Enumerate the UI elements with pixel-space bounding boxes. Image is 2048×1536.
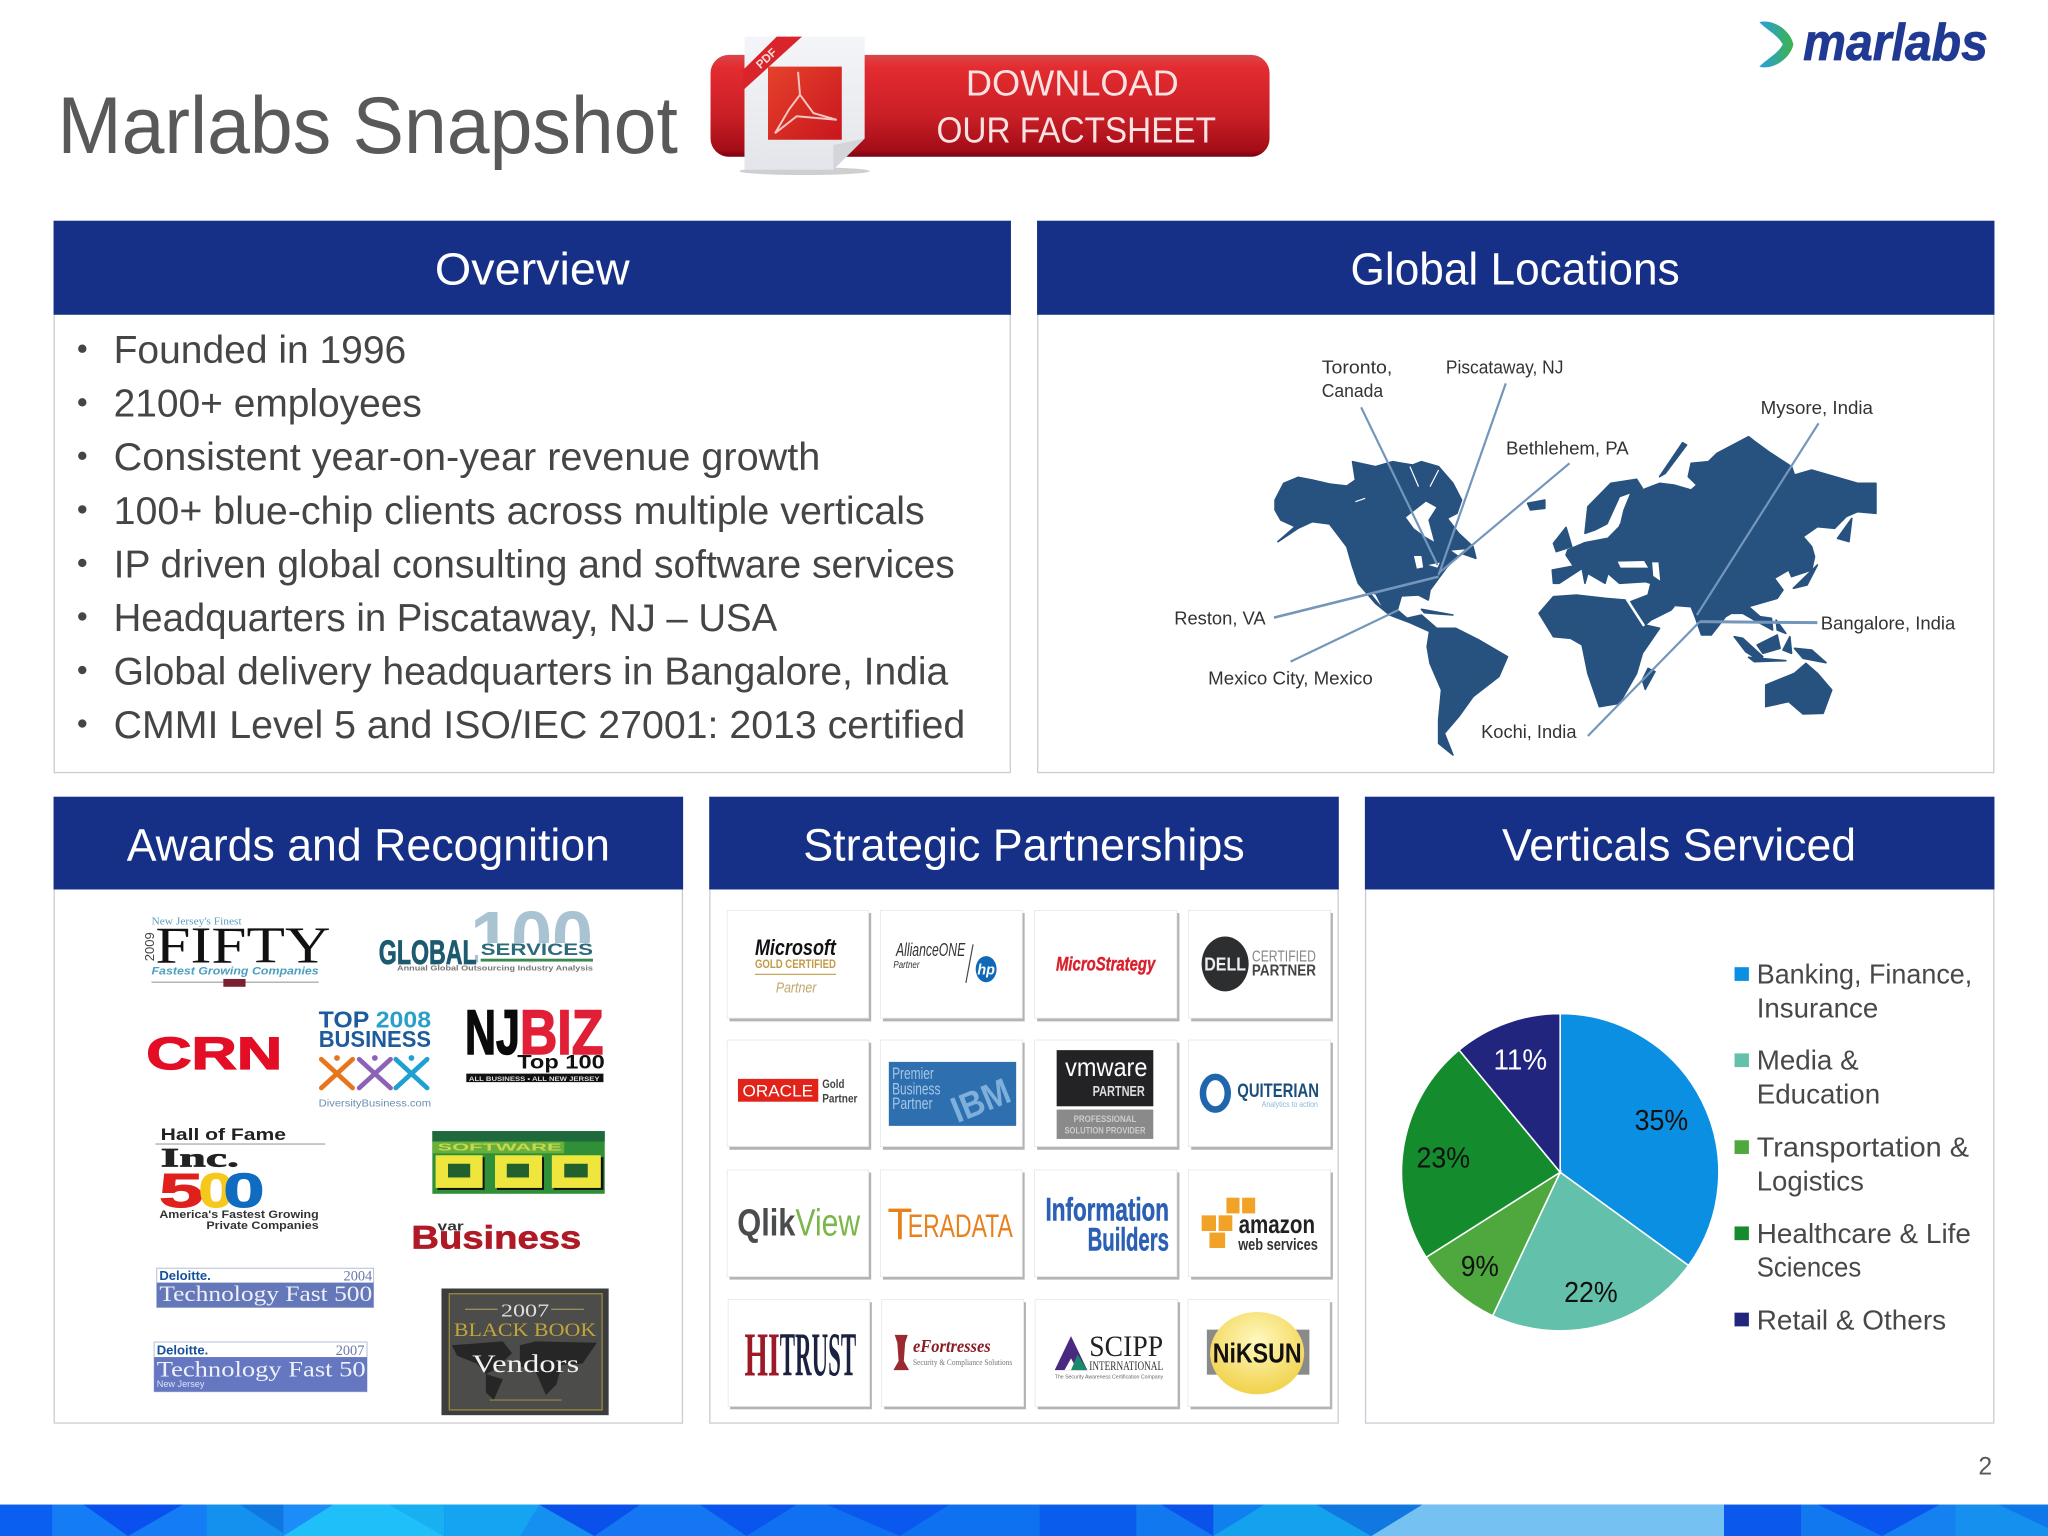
bullet list: Founded in 1996 [114,329,406,372]
award: var business: Business [411,1219,581,1256]
award: software 500 [432,1131,605,1194]
footer band [0,1505,2048,1536]
legend: Transportation & [1757,1132,1969,1163]
partner: scipp [1055,1330,1163,1381]
legend: Logistics [1757,1166,1864,1197]
partner: microsoft: GOLD CERTIFIED [755,958,836,971]
bullet list: Consistent year-on-year revenue growth [114,436,820,479]
partner: scipp: INTERNATIONAL [1089,1358,1163,1373]
partner: oracle: Partner [822,1092,858,1105]
partner: scipp: The Security Awareness Certification Company [1055,1375,1163,1381]
partner: teradata: ERADATA [908,1207,1013,1244]
heading: awards: Awards and Recognition [127,820,610,871]
partner: qlikview: View [795,1203,861,1245]
partner: dell [1202,936,1316,991]
pie data labels [1416,1045,1688,1309]
award: crn: CRN [146,1028,282,1079]
award: global services 100 [379,898,596,979]
partner: dell: PARTNER [1252,963,1316,980]
award: njbiz top 100: BIZ [520,998,603,1068]
partner: qlikview: Qlik [737,1203,796,1245]
partner: niksun [1207,1312,1309,1394]
partner: hp allianceone: Partner [893,960,920,971]
pie data labels: 35% [1635,1105,1688,1137]
partner: hp allianceone: AllianceONE [895,939,966,960]
bullet list: IP driven global consulting and software services [114,543,955,586]
award: black book vendors: Vendors [472,1351,579,1378]
partner: efortresses: eFortresses [913,1336,991,1356]
partner: oracle: Gold [822,1078,844,1091]
partner: microsoft: Partner [776,981,817,997]
location labels [1174,357,1956,742]
award: fifty: FIFTY [155,917,330,975]
bullet list [78,329,965,747]
partner: teradata: T [888,1201,912,1250]
partner: ibm: IBM [945,1070,1016,1131]
heading: verticals serviced: Verticals Serviced [1502,820,1856,871]
partner: ibm: Premier [892,1064,934,1083]
page number: 2 [1978,1454,1992,1481]
partner: vmware: SOLUTION PROVIDER [1064,1126,1146,1136]
award: global services 100: 100 [470,898,593,979]
legend [1735,959,1972,1336]
partner: amazon web services: amazon [1239,1209,1315,1239]
award: top 2008 business [319,1006,431,1109]
location labels: Mexico City, Mexico [1208,667,1373,688]
award: top 2008 business: TOP 2008 [319,1006,431,1032]
pie chart [1401,1014,1719,1331]
award: fifty [142,917,330,987]
partner: information builders: Builders [1088,1221,1169,1258]
partner: ibm: Partner [892,1094,933,1113]
award: njbiz top 100: ALL BUSINESS • ALL NEW JERSEY [469,1076,600,1083]
award: global services 100: SERVICES [481,941,593,959]
award: inc 500 hall of fame: 0 [223,1164,264,1218]
location labels: Mysore, India [1761,397,1874,418]
award: black book vendors: BLACK BOOK [454,1320,597,1341]
download factsheet button [711,37,1270,175]
partner: oracle: ORACLE [743,1081,813,1100]
partner: vmware: PROFESSIONAL [1074,1114,1137,1124]
award: fifty: Fastest Growing Companies [152,965,319,977]
award: deloitte technology fast 500: Deloitte. [159,1268,211,1283]
award: njbiz top 100: Top 100 [517,1052,605,1073]
location labels: Kochi, India [1481,721,1577,742]
partner cards backgrounds [727,910,1333,1409]
award: black book vendors: 2007 [501,1301,549,1321]
heading: strategic partnerships: Strategic Partnerships [803,820,1245,871]
award: fifty: New Jersey's Finest [152,917,242,928]
partner: hp allianceone [893,939,997,983]
award: inc 500 hall of fame: Hall of Fame [161,1125,286,1144]
award: deloitte technology fast 50 [154,1342,367,1392]
partner: amazon web services: web services [1237,1235,1318,1254]
bullet list: Headquarters in Piscataway, NJ – USA [114,597,778,640]
partner: efortresses: Security & Compliance Solutions [913,1358,1012,1367]
award: njbiz top 100 [465,998,606,1083]
panel: global locations [1037,221,1994,773]
legend: Sciences [1757,1252,1861,1283]
partner: hitrust [744,1319,856,1389]
panel: strategic partnerships: TRUST [780,1319,856,1389]
panel: overview [54,221,1011,773]
award: top 2008 business: DiversityBusiness.com [319,1098,431,1109]
award: global services 100: Annual Global Outsourcing Industry Analysis [397,964,593,972]
award: deloitte technology fast 500: Technology Fast 500 [159,1281,372,1306]
panel: awards and recognition [54,797,683,1423]
award: var business: var [438,1218,464,1233]
logo: marlabs: marlabs [1803,14,1988,72]
partner: quiterian: Analytics to action [1262,1100,1318,1109]
partner: hp allianceone: hp [977,962,995,978]
heading: global locations: Global Locations [1351,244,1680,295]
legend: Retail & Others [1757,1305,1946,1336]
download factsheet button: PDF [754,46,780,71]
partner: qlikview [737,1203,861,1245]
legend: Insurance [1757,992,1878,1023]
award: deloitte technology fast 50: Deloitte. [157,1342,208,1357]
partner: dell: DELL [1204,953,1246,974]
world map [1275,437,1876,755]
location labels: Piscataway, NJ [1446,357,1563,378]
partner: ibm: Business [892,1080,940,1099]
award: global services 100: GLOBAL [379,934,477,972]
legend: Education [1757,1079,1880,1110]
pie data labels: 22% [1564,1277,1618,1309]
pie data labels: 11% [1494,1045,1547,1077]
pie data labels: 9% [1461,1251,1499,1283]
partner: amazon web services [1202,1198,1318,1254]
award: inc 500 hall of fame: Inc. [161,1143,239,1172]
award: software 500: SOFTWARE [438,1143,563,1154]
award: inc 500 hall of fame: 0 [199,1164,234,1218]
location labels: Bangalore, India [1821,613,1956,634]
location connector lines [1274,383,1819,736]
partner: vmware: vmware [1065,1052,1147,1082]
award: njbiz top 100: NJ [465,998,520,1068]
award: deloitte technology fast 500 [157,1268,374,1307]
panel: strategic partnerships [709,797,1339,1423]
partner: microstrategy: MicroStrategy [1056,953,1156,975]
panel: verticals serviced [1365,797,1994,1423]
heading: overview: Overview [435,244,631,295]
award: deloitte technology fast 50: New Jersey [157,1379,205,1389]
title: Marlabs Snapshot [57,81,678,171]
partner: dell: CERTIFIED [1252,948,1316,965]
partner: efortresses [893,1335,1012,1370]
partner: quiterian: QUITERIAN [1237,1080,1319,1102]
award: top 2008 business: BUSINESS [319,1026,431,1052]
partner: information builders: Information [1046,1191,1169,1228]
legend: Healthcare & Life [1757,1218,1971,1249]
location labels: Reston, VA [1174,607,1266,628]
partner: hitrust: HI [744,1319,780,1389]
legend: Banking, Finance, [1757,959,1972,990]
location labels: Canada [1322,380,1384,401]
location labels: Toronto, [1322,357,1392,378]
bullet list: Global delivery headquarters in Bangalore, India [114,650,948,693]
partner: niksun: NiKSUN [1213,1337,1302,1368]
award: deloitte technology fast 500: 2004 [344,1269,372,1285]
award: deloitte technology fast 50: 2007 [336,1343,364,1359]
bullet list: 2100+ employees [114,383,422,426]
award: inc 500 hall of fame [155,1125,325,1232]
award: inc 500 hall of fame: America's Fastest Growing [159,1209,319,1221]
partner: teradata [888,1201,1013,1250]
partner: oracle [738,1078,858,1105]
award: inc 500 hall of fame: Private Companies [206,1220,319,1232]
legend: Media & [1757,1045,1859,1076]
partner: microsoft [755,935,837,997]
award: deloitte technology fast 50: Technology Fast 50 [157,1357,366,1382]
bullet list: 100+ blue-chip clients across multiple verticals [114,490,925,533]
partner: ibm [889,1062,1016,1131]
award: fifty: 2009 [142,932,157,961]
download factsheet button: OUR FACTSHEET [936,109,1216,150]
download factsheet button: DOWNLOAD [966,62,1179,103]
partner: information builders [1046,1191,1169,1258]
partner: microsoft: Microsoft [755,935,837,960]
bullet list: CMMI Level 5 and ISO/IEC 27001: 2013 certified [114,704,965,747]
partner: vmware [1057,1050,1153,1139]
partner: scipp: SCIPP [1089,1330,1163,1363]
award: black book vendors [441,1288,609,1415]
pie data labels: 23% [1416,1143,1470,1175]
award: inc 500 hall of fame: 5 [159,1164,203,1218]
location labels: Bethlehem, PA [1506,438,1630,459]
partner: quiterian [1203,1077,1319,1110]
partner: vmware: PARTNER [1093,1084,1145,1100]
